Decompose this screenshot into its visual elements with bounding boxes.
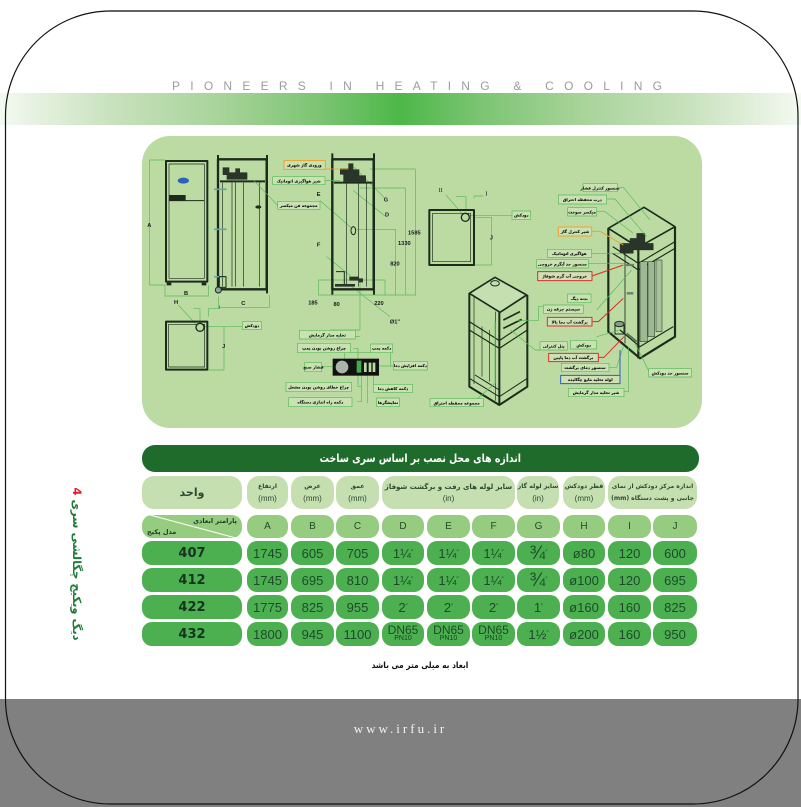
label: flue limit sensor: سنسور حد دودکش	[652, 370, 689, 375]
model 422 row: 825	[664, 600, 686, 614]
rear view drawing: 185	[308, 300, 318, 306]
model 412 row: 120	[619, 572, 640, 588]
label: fault light	[286, 382, 351, 392]
parameter letters row: D	[399, 520, 407, 532]
model 432 row: PN10	[394, 635, 412, 642]
model 412 row: 412	[178, 572, 206, 588]
label: upper return	[547, 317, 592, 326]
front view drawing	[147, 160, 208, 297]
tagline: PIONEERS IN HEATING & COOLING	[172, 79, 662, 93]
rear view drawing: F	[317, 243, 321, 249]
panel: technical drawings	[142, 136, 702, 428]
label: on light	[297, 343, 351, 353]
label: combustion chamber: مجموعه محفظه احتراق	[434, 400, 480, 405]
model 422 row: 160	[619, 600, 640, 614]
label: flue iso: دودکش	[576, 342, 591, 347]
front view drawing: A	[147, 223, 151, 229]
label: outlet temperature sensor: سنسور حد آبگرم خروجی	[538, 261, 587, 266]
label: gas control valve: شیر کنترل گاز	[560, 229, 589, 234]
label: return sensor: سنسور دمای برگشت	[564, 365, 606, 370]
model 432 row: DN65	[433, 623, 464, 637]
label: pump button: دکمه پمپ	[372, 346, 391, 351]
green gradient band	[0, 93, 801, 125]
model 412 row: ø100	[569, 572, 599, 588]
parameter letters row	[142, 515, 697, 538]
label: pump button	[371, 344, 393, 353]
label: combustion chamber	[430, 399, 483, 407]
control panel detail	[322, 348, 393, 403]
top view right drawing: II	[439, 188, 443, 194]
header: flue centre: جانبی و پشت دستگاه (mm)	[611, 494, 694, 502]
model 422 row: ø160	[569, 600, 599, 614]
model 432 row: DN65	[388, 623, 418, 637]
header: flue diameter	[563, 476, 605, 509]
side view drawing	[214, 155, 278, 309]
header: depth	[336, 476, 379, 509]
model 432 row: 945	[302, 626, 323, 642]
label: flue iso	[571, 340, 597, 349]
table header row	[142, 476, 697, 509]
model 407 row: 407	[178, 546, 206, 560]
label: control panel	[540, 342, 567, 350]
label: combustion chamber door	[558, 195, 607, 204]
rear view drawing: 80	[334, 302, 340, 308]
header: width: عرض	[304, 482, 321, 490]
header: flue centre: اندازه مرکز دودکش از نمای	[612, 482, 693, 490]
model 412 row: 1¼	[393, 572, 411, 588]
label: fault light: چراغ خطای روشن بودن مشعل	[288, 384, 349, 389]
label: temperature up button	[393, 361, 427, 370]
model 412 row: 1745	[253, 572, 282, 588]
table title bar: اندازه های محل نصب بر اساس سری ساخت	[320, 451, 521, 465]
model 412 row: ″	[545, 577, 547, 583]
header: flue centre	[608, 476, 697, 509]
label: displays	[377, 398, 399, 407]
header: width	[291, 476, 334, 509]
label: flue top: دودکش	[514, 213, 529, 218]
parameter letters row: J	[672, 520, 678, 532]
label: automatic vent: هواگیری اتوماتیک	[552, 251, 587, 256]
label: fan mixer	[278, 201, 320, 209]
label: upper return: برگشت آب دما بالا	[552, 319, 588, 324]
model 412 row: ″	[456, 577, 459, 583]
model 432 row: 1½	[528, 626, 546, 642]
model 432 row: DN65	[478, 623, 509, 637]
model 407 row: 120	[619, 546, 640, 560]
parameter and model key cell: پارامتر ابعادی	[193, 517, 237, 525]
label: ignition system	[543, 305, 583, 313]
parameter letters row: H	[580, 520, 588, 532]
model 422 row: 955	[347, 600, 368, 614]
model 432 row: PN10	[440, 635, 457, 642]
label: flue top	[512, 211, 531, 219]
label: condensate drain pipe: لوله تخلیه مایع چگالیده	[568, 377, 613, 382]
model 412 row: 1¼	[483, 572, 501, 588]
isometric view right	[608, 207, 675, 358]
model 432 row: 1100	[344, 626, 371, 642]
parameter letters row: E	[445, 520, 452, 532]
label: control panel: پنل کنترلی	[543, 343, 565, 348]
label: boiler body: بدنه دیگ	[571, 296, 588, 301]
model 407 row: 705	[347, 546, 368, 560]
rear view drawing: 1585	[408, 231, 421, 237]
header: flow and return pipe size: سایز لوله های رفت و برگشت شوفاژ	[385, 482, 512, 490]
label: fuel mixer	[568, 208, 597, 216]
model 407 row	[142, 541, 697, 565]
label: heating circuit drain valve: شیر تخلیه مدار گرمایش	[573, 390, 619, 395]
label: gas control valve	[558, 227, 592, 236]
model 422 row	[142, 595, 697, 619]
model 407 row: ″	[501, 550, 504, 556]
side view drawing: C	[241, 301, 245, 307]
model 432 row: ø200	[569, 626, 599, 642]
parameter letters row: G	[535, 520, 542, 532]
parameter letters row: F	[490, 520, 497, 532]
label: city gas inlet	[284, 161, 325, 169]
vertical series title: دیگ ویکیج چگالشی سری 4	[69, 487, 84, 641]
model 412 row: ″	[501, 577, 504, 583]
front view drawing: B	[184, 291, 188, 297]
model 422 row: ″	[541, 604, 543, 610]
label: on light: چراغ روشن بودن پمپ	[302, 345, 346, 350]
header: height: ارتفاع	[258, 482, 277, 490]
label: temperature down button: دکمه کاهش دما	[378, 386, 408, 391]
header: flue diameter: (mm)	[575, 494, 593, 502]
label: start key: دکمه راه اندازی دستگاه	[297, 400, 343, 405]
top view right drawing	[429, 188, 512, 265]
label: displays: نمایشگرها	[378, 400, 399, 405]
header: gas pipe size: سایز لوله گاز	[518, 482, 558, 490]
label: automatic air vent	[273, 177, 340, 185]
model 407 row: ø80	[573, 546, 595, 560]
model 432 row	[142, 622, 697, 646]
model 407 row: ¾	[530, 542, 545, 564]
label: flue	[242, 322, 262, 329]
model 412 row: 695	[302, 572, 323, 588]
model 412 row	[142, 568, 697, 592]
label: combustion chamber door: درب محفظه احتراق	[563, 197, 602, 202]
top view drawing: H	[174, 300, 178, 306]
model 412 row: 1¼	[438, 572, 456, 588]
label: gauge	[303, 363, 324, 372]
top view drawing: J	[222, 344, 225, 350]
model 412 row: 810	[347, 572, 368, 588]
header: depth: (mm)	[348, 494, 367, 502]
header: height: (mm)	[258, 494, 277, 502]
header: flue diameter: قطر دودکش	[565, 482, 603, 490]
footer band	[0, 699, 801, 807]
rear view drawing: G	[384, 198, 389, 204]
label: heating circuit drain	[299, 330, 360, 339]
label: boiler body	[568, 294, 591, 303]
model 432 row: 1800	[253, 626, 282, 642]
header: unit	[142, 476, 242, 509]
label: lower return	[549, 353, 598, 362]
header: gas pipe size	[517, 476, 559, 509]
header: width: (mm)	[303, 494, 322, 502]
model 407 row: 1¼	[483, 546, 501, 560]
label: heating circuit drain valve	[568, 388, 624, 397]
label: start key	[289, 398, 352, 407]
label: temperature up button: دکمه افزایش دما	[394, 363, 427, 368]
label: outlet temperature sensor	[537, 260, 588, 268]
rear view drawing: 820	[390, 261, 400, 267]
parameter letters row: I	[628, 520, 631, 532]
label: heating circuit drain: تخلیه مدار گرمایش	[309, 332, 346, 337]
model 407 row: 1745	[253, 546, 282, 560]
top view right drawing: I	[485, 191, 487, 198]
model 407 row: ″	[411, 550, 413, 556]
label: lower return: برگشت آب دما پایین	[553, 355, 594, 360]
header: depth: عمق	[351, 482, 364, 490]
parameter letters row: A	[264, 520, 271, 532]
parameter and model key cell	[142, 515, 242, 538]
model 422 row: 825	[302, 600, 323, 614]
label: flue limit sensor	[649, 369, 692, 377]
rear view drawing: Ø1"	[390, 319, 400, 325]
isometric view left	[469, 277, 527, 405]
model 422 row: 1	[534, 600, 541, 614]
header: flow and return pipe size	[382, 476, 515, 509]
model 407 row: 1¼	[438, 546, 456, 560]
model 432 row: ″	[546, 631, 549, 637]
callout leader lines	[588, 187, 692, 392]
label: temperature down button	[373, 384, 413, 392]
model 422 row: 2	[444, 600, 451, 614]
model 412 row: ¾	[530, 570, 545, 590]
model 432 row: PN10	[485, 635, 502, 642]
model 407 row: 1¼	[393, 546, 411, 560]
model 432 row: 950	[664, 626, 686, 642]
label: flue: دودکش	[245, 323, 259, 328]
header: flow and return pipe size: (in)	[443, 494, 454, 502]
label: pressure sensor: سنسور کنترل فشار	[579, 185, 620, 190]
header: gas pipe size: (in)	[532, 494, 544, 502]
top view right drawing: J	[490, 235, 493, 241]
model 422 row: 2	[398, 600, 406, 614]
model 432 row: 160	[619, 626, 640, 642]
header: unit: واحد	[180, 486, 204, 498]
label: fuel mixer: میکسر سوخت	[568, 209, 596, 214]
label: gauge: فشار سنج	[303, 365, 324, 370]
label: ignition system: سیستم جرقه زن	[547, 307, 580, 312]
table title bar	[142, 445, 699, 472]
header: height	[247, 476, 288, 509]
parameter and model key cell: مدل پکیج	[147, 528, 176, 536]
model 412 row: ″	[411, 577, 413, 583]
model 422 row: ″	[496, 604, 498, 610]
label: condensate drain pipe	[561, 375, 620, 384]
table note: ابعاد به میلی متر می باشد	[372, 661, 468, 671]
model 412 row: 695	[664, 572, 686, 588]
top view drawing	[166, 300, 262, 370]
website: www.irfu.ir	[354, 721, 447, 736]
label: return sensor	[561, 363, 609, 372]
model 422 row: 2	[489, 600, 496, 614]
label: automatic vent	[547, 249, 592, 257]
label: hot water outlet	[538, 272, 592, 281]
model 407 row: 605	[302, 546, 323, 560]
rear view drawing: 1330	[398, 241, 411, 247]
rear view drawing: E	[317, 192, 321, 198]
model 422 row: 422	[178, 600, 206, 614]
model 422 row: 1775	[253, 600, 282, 614]
label: city gas inlet: ورودی گاز شهری	[287, 163, 322, 168]
model 407 row: ″	[456, 550, 459, 556]
parameter letters row: B	[309, 520, 316, 532]
model 422 row: ″	[406, 604, 408, 610]
label: pressure sensor	[579, 184, 620, 192]
label: fan mixer: مجموعه فن میکسر	[279, 203, 318, 208]
parameter letters row: C	[354, 520, 361, 532]
rear view drawing: D	[385, 213, 389, 219]
model 407 row: ″	[545, 550, 547, 556]
model 407 row: 600	[664, 546, 686, 560]
rear view drawing: 220	[374, 301, 384, 307]
side view drawing: I	[219, 304, 220, 309]
rear view drawing	[308, 153, 421, 330]
label: hot water outlet: خروجی آب گرم شوفاژ	[541, 274, 587, 279]
model 432 row: 432	[178, 626, 206, 642]
label: automatic air vent: شیر هواگیری اتوماتیک	[277, 178, 321, 183]
model 422 row: ″	[451, 604, 453, 610]
